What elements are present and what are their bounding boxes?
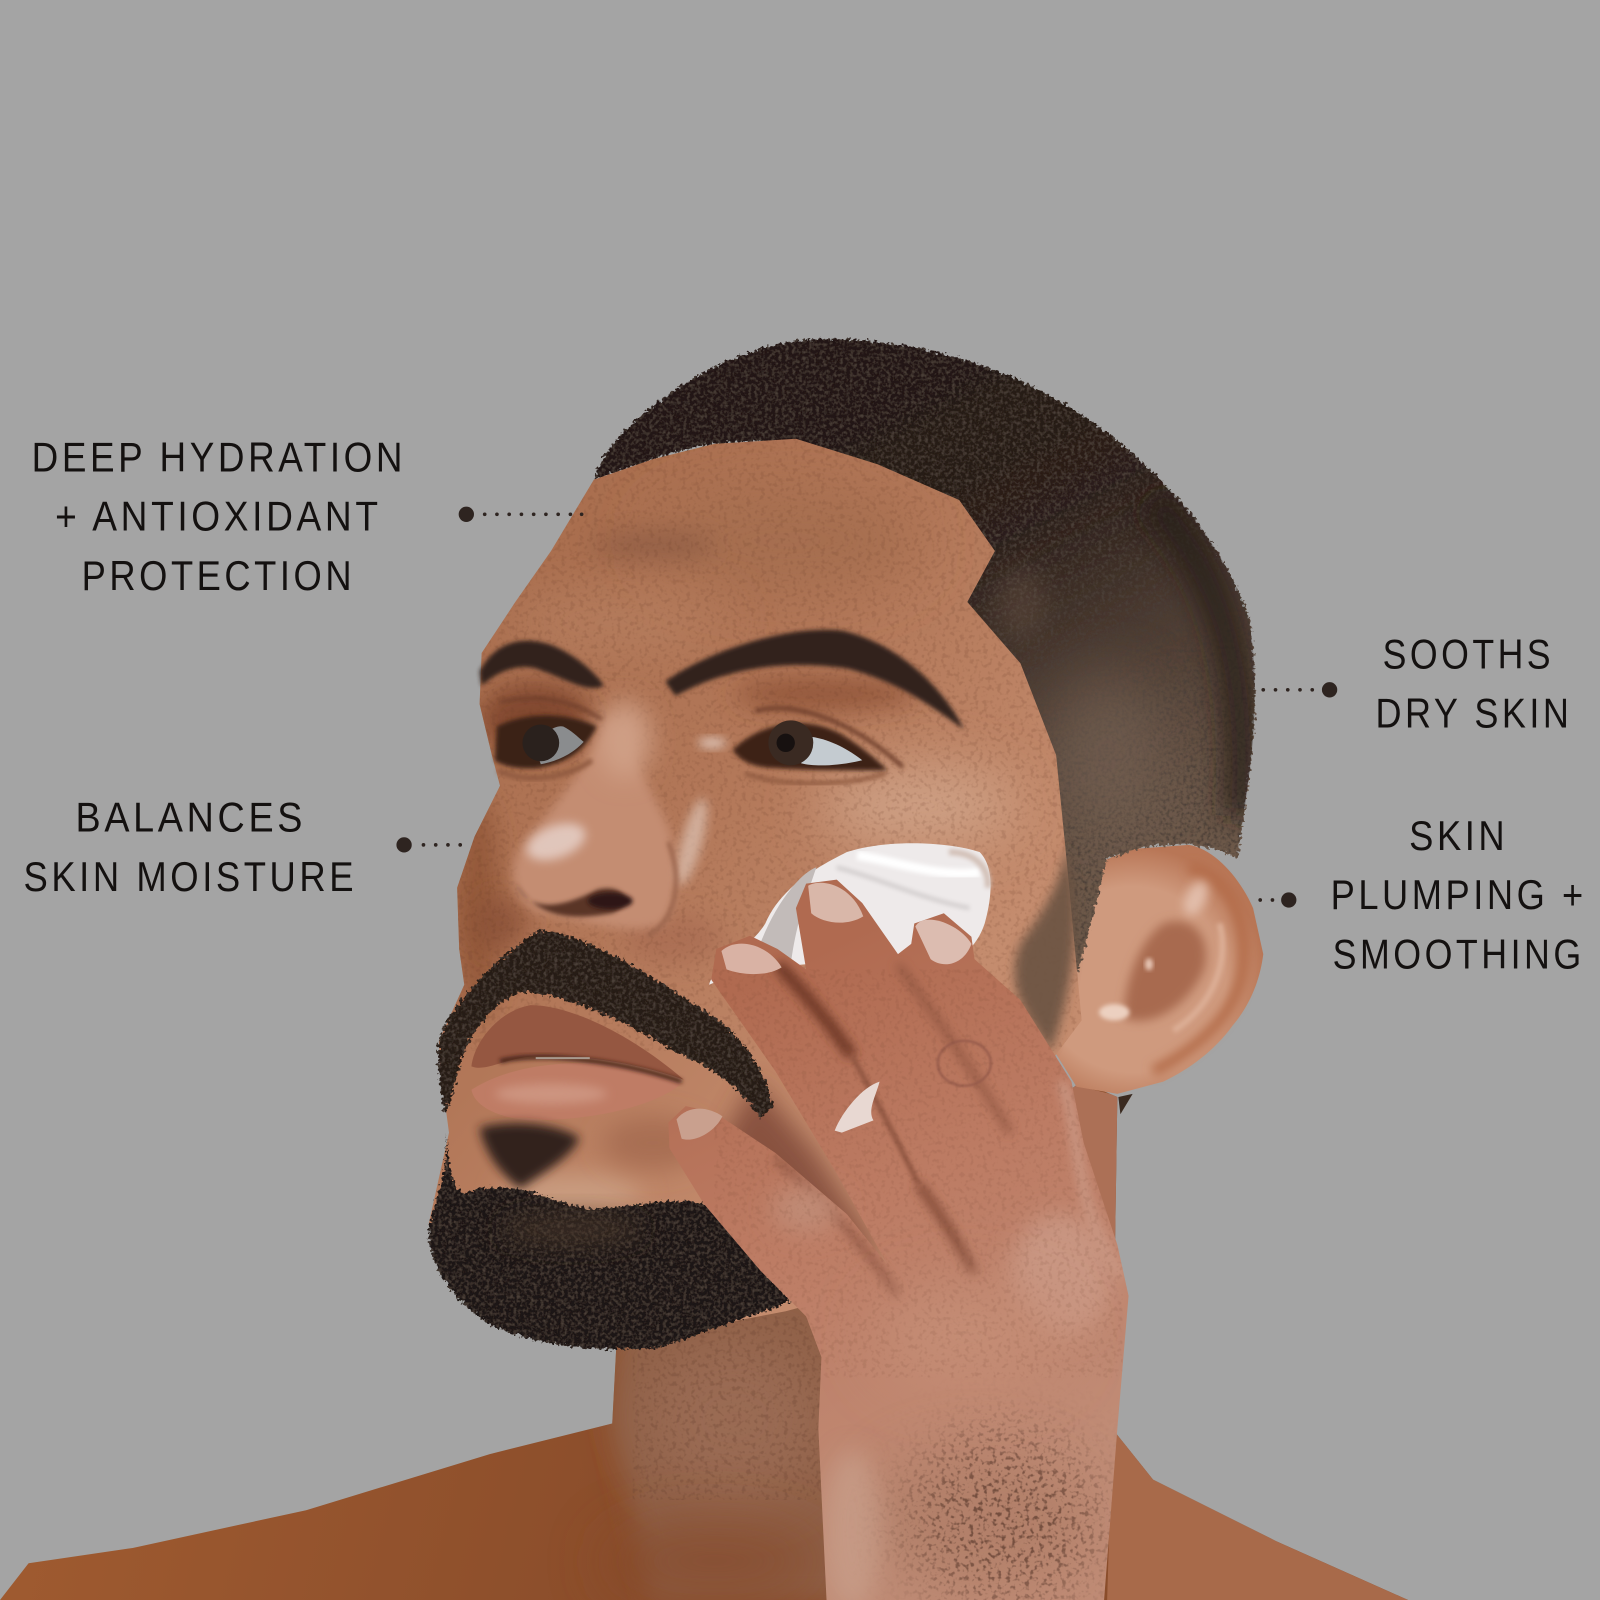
nose [513, 701, 727, 936]
infographic canvas [0, 336, 1582, 1600]
connector: temple [1261, 682, 1337, 697]
callout: deep hydration + antioxidant protection [32, 433, 583, 599]
illustration: man applying cream to cheek [0, 339, 1408, 1600]
hair [594, 339, 1255, 1051]
face [429, 439, 1082, 1337]
connector: ear [1258, 892, 1296, 908]
hair shading [995, 500, 1242, 837]
chin highlight in beard [500, 1213, 643, 1246]
fingernails [677, 883, 971, 1140]
callout: skin plumping + smoothing [1258, 812, 1587, 977]
cream on cheek [709, 843, 991, 985]
face tonal shading [449, 439, 1082, 1265]
callout: balances skin moisture: SKIN MOISTURE [23, 853, 357, 900]
lips [471, 1005, 684, 1120]
callout: sooths dry skin: SOOTHS [1383, 630, 1554, 677]
eyebrows [480, 630, 964, 730]
beard [428, 1133, 791, 1349]
right eye [733, 708, 903, 783]
hand [668, 880, 1133, 1600]
left eye [495, 698, 602, 778]
hand shading and creases [714, 964, 1133, 1600]
callout: sooths dry skin [1261, 630, 1572, 737]
shoulders and neck [0, 1082, 1408, 1600]
callout: sooths dry skin: DRY SKIN [1376, 690, 1572, 737]
connector: nose side [396, 837, 462, 853]
connector: forehead [459, 507, 583, 522]
callout: deep hydration + antioxidant protection: + ANTIOXIDANT [55, 493, 382, 540]
callout: deep hydration + antioxidant protection: PROTECTION [82, 552, 355, 599]
ear [1051, 845, 1263, 1114]
callout: balances skin moisture [23, 794, 462, 900]
cream smear on knuckle [835, 1082, 880, 1133]
callout: balances skin moisture: BALANCES [76, 794, 306, 841]
sideburn stubble [1015, 847, 1076, 1051]
callout: skin plumping + smoothing: SKIN [1409, 812, 1508, 859]
callout: deep hydration + antioxidant protection: DEEP HYDRATION [32, 433, 406, 480]
soul patch [480, 1123, 580, 1189]
moustache [438, 931, 773, 1117]
